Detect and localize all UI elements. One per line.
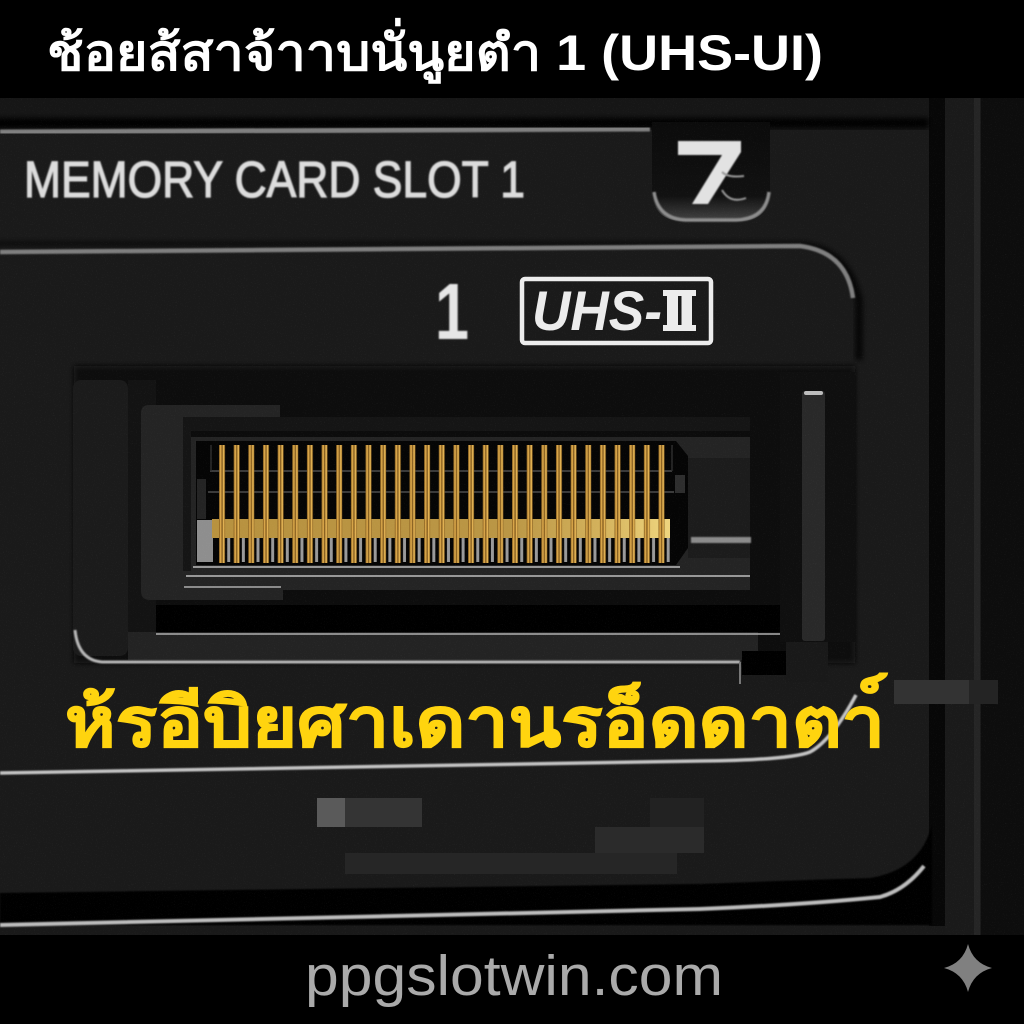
icon: sparkle <box>944 944 992 992</box>
icon: slot 7 key <box>652 122 770 221</box>
panel: outer recessed plate <box>0 118 945 936</box>
panel: upper slot door <box>0 242 862 774</box>
title: ช้อยส้สาจ้าาบนั่นูยตำ 1 (UHS-UI) <box>47 18 823 84</box>
title bar <box>0 0 1024 98</box>
element: card holder frame <box>141 405 751 600</box>
footer website: ppgslotwin.com <box>305 944 723 1008</box>
footer bar <box>0 935 1024 1024</box>
label: slot number 1: 1 <box>435 267 469 356</box>
element: gold connector contacts <box>196 441 688 565</box>
badge: UHS-II: UHS- <box>532 279 662 342</box>
label: memory card slot 1: MEMORY CARD SLOT 1 <box>24 151 525 208</box>
element: pixelated blur patch lower <box>317 798 704 874</box>
panel: card slot opening <box>73 366 855 684</box>
element: pixelated blur patch right <box>894 680 998 704</box>
element: slider latch <box>802 391 825 641</box>
yellow headline: ห้รอีบิยศาเดานรอ็ดดาตา์ <box>65 672 888 761</box>
